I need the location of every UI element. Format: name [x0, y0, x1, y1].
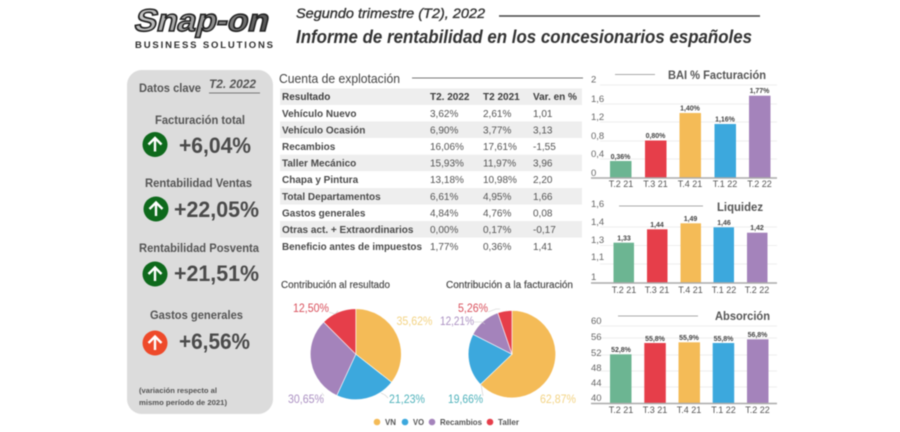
pie chart: contribución al resultado — [281, 279, 432, 406]
bar chart: BAI % facturación: T.2 22 — [747, 179, 772, 189]
kpi: rentabilidad posventa: +21,51% — [174, 261, 259, 286]
table: resultados: 4,84% — [430, 208, 458, 220]
table: resultados: 3,13 — [533, 126, 553, 136]
table: resultados: T2 2021 — [483, 92, 520, 103]
pie legend: Taller — [498, 417, 520, 427]
pie chart: contribución al resultado: 12,50% — [293, 303, 329, 315]
table: resultados: Var. en % — [533, 92, 577, 103]
bar chart: BAI % facturación: T.1 22 — [713, 179, 737, 189]
pie legend: VN — [385, 417, 396, 427]
bar chart: absorción: 40 — [591, 393, 602, 404]
bar chart: absorción: 55,8% — [714, 336, 734, 343]
pie chart: contribución al resultado: 21,23% — [389, 394, 425, 406]
bar chart: absorción: 55,8% — [645, 336, 666, 343]
table: resultados: 10,98% — [483, 175, 517, 186]
kpi: gastos generales: +6,56% — [179, 329, 250, 354]
bar chart: liquidez: T.3 21 — [645, 285, 669, 295]
bar chart: absorción: 55,9% — [679, 335, 700, 342]
bar chart: liquidez: Liquidez — [717, 200, 763, 214]
kpi: rentabilidad ventas — [144, 176, 259, 222]
table: resultados: Chapa y Pintura — [282, 175, 359, 186]
table: resultados: -0,17 — [533, 225, 556, 236]
pie chart: contribución al resultado: Contribución al resultado — [281, 279, 390, 291]
bar chart: liquidez: 1,33 — [617, 236, 631, 242]
bar chart: absorción: 56,8% — [748, 332, 768, 339]
table heading: cuenta de explotación: Cuenta de explotación — [279, 72, 400, 86]
table: resultados: 11,97% — [483, 158, 516, 170]
table: resultados: 6,90% — [430, 126, 458, 136]
pie chart: contribución a la facturación: Contribución a la facturación — [446, 279, 573, 291]
table: resultados — [280, 88, 582, 253]
bar chart: BAI % facturación: BAI % Facturación — [668, 68, 766, 82]
bar chart: BAI % facturación — [591, 68, 777, 189]
table: resultados: Vehículo Nuevo — [282, 109, 356, 120]
table: resultados: 1,66 — [533, 192, 553, 203]
table: resultados: T2. 2022 — [430, 92, 470, 103]
bar chart: liquidez: T.2 21 — [612, 285, 636, 295]
table: resultados: 4,95% — [483, 192, 511, 203]
pie chart: contribución a la facturación: 19,66% — [448, 394, 483, 406]
logo: Snap-on Business Solutions: BUSINESS SOLUTIONS — [135, 40, 273, 51]
table: resultados: Otras act. + Extraordinarios — [282, 225, 414, 236]
bar chart: absorción: T.2 22 — [745, 405, 770, 415]
bar chart: BAI % facturación: 1,40% — [680, 106, 701, 112]
bar chart: absorción: T.3 21 — [643, 405, 667, 415]
bar chart: BAI % facturación: 0 — [591, 168, 596, 179]
bar chart: absorción: 52,8% — [611, 347, 632, 354]
bar chart: liquidez: 1,42 — [750, 225, 764, 232]
kpi: facturación total: +6,04% — [179, 133, 251, 158]
bar chart: liquidez: T.1 22 — [712, 285, 736, 295]
bar chart: absorción: T.4 21 — [677, 405, 701, 415]
logo: Snap-on Business Solutions: Snap-on — [131, 4, 274, 38]
bar chart: liquidez: 1 — [591, 272, 596, 283]
bar chart: absorción — [591, 309, 777, 415]
bar chart: liquidez: 1,4 — [591, 217, 604, 228]
bar chart: BAI % facturación: T.4 21 — [678, 179, 702, 189]
bar chart: liquidez: 1,46 — [717, 220, 731, 227]
bar chart: BAI % facturación: 1,6 — [591, 94, 604, 105]
bar chart: liquidez: 1,1 — [591, 252, 604, 263]
bar chart: absorción: 52 — [591, 348, 602, 359]
bar chart: absorción: Absorción — [715, 309, 770, 323]
bar chart: BAI % facturación: 0,4 — [591, 149, 604, 160]
bar chart: BAI % facturación: 2 — [591, 74, 596, 86]
bar chart: absorción: T.1 22 — [711, 405, 736, 415]
table: resultados: 3,62% — [430, 109, 458, 120]
table: resultados: 2,20 — [533, 175, 553, 186]
bar chart: BAI % facturación: 0,8 — [591, 131, 604, 142]
table: resultados: 15,93% — [430, 158, 464, 170]
table: resultados: 6,61% — [430, 192, 458, 203]
table: resultados: 0,00% — [430, 225, 458, 236]
bar chart: liquidez: 1,44 — [650, 222, 664, 229]
bar chart: liquidez — [591, 199, 777, 295]
table: resultados: 1,77% — [430, 242, 458, 253]
bar chart: liquidez: 1,6 — [591, 199, 604, 210]
kpi: rentabilidad ventas: Rentabilidad Ventas — [145, 176, 252, 190]
bar chart: BAI % facturación: 1,77% — [750, 88, 770, 95]
bar chart: BAI % facturación: 0,36% — [611, 154, 631, 161]
pie chart: contribución a la facturación — [440, 279, 576, 406]
table: resultados: Recambios — [282, 142, 336, 153]
table: resultados: Vehículo Ocasión — [282, 126, 365, 136]
table: resultados: Taller Mecánico — [282, 158, 356, 170]
bar chart: liquidez: 1,49 — [684, 216, 697, 223]
footnote: mismo período de 2021) — [139, 398, 228, 407]
pie chart: contribución a la facturación: 12,21% — [440, 316, 474, 328]
kpi: rentabilidad ventas: +22,05% — [174, 197, 259, 222]
table: resultados: 4,76% — [483, 208, 511, 220]
bar chart: BAI % facturación: 1,16% — [715, 116, 736, 124]
table: resultados: 0,36% — [483, 242, 511, 253]
table: resultados: Total Departamentos — [282, 192, 381, 203]
pie chart: contribución a la facturación: 5,26% — [458, 303, 488, 315]
kpi: rentabilidad posventa — [139, 241, 259, 286]
pie legend: VO — [413, 417, 424, 427]
kpi: rentabilidad posventa: Rentabilidad Posventa — [139, 241, 259, 255]
kpi: facturación total: Facturación total — [155, 113, 245, 127]
table: resultados: 1,41 — [533, 242, 553, 253]
kpi: facturación total — [142, 113, 251, 158]
table: resultados: 2,61% — [483, 109, 511, 120]
bar chart: absorción: T.2 21 — [609, 405, 633, 415]
table: resultados: 3,77% — [483, 126, 511, 136]
panel heading: T2. 2022 — [209, 77, 256, 91]
pie chart: contribución al resultado: 30,65% — [288, 394, 324, 406]
bar chart: BAI % facturación: 1,2 — [591, 112, 604, 123]
pie legend: Recambios — [440, 417, 482, 427]
table: resultados: 0,08 — [533, 208, 553, 220]
footnote: (variación respecto al — [139, 386, 217, 395]
bar chart: absorción: 44 — [591, 378, 602, 389]
bar chart: liquidez: 1,3 — [591, 235, 604, 246]
bar chart: liquidez: T.2 22 — [745, 285, 769, 295]
kpi: gastos generales: Gastos generales — [150, 308, 243, 322]
table: resultados: 13,18% — [430, 175, 464, 186]
pie legend — [374, 417, 520, 427]
bar chart: absorción: 48 — [591, 363, 602, 374]
table: resultados: Resultado — [282, 92, 330, 103]
title: Informe de rentabilidad en los concesionarios españoles — [296, 27, 752, 47]
kpi: gastos generales — [142, 308, 250, 356]
bar chart: liquidez: T.4 21 — [678, 285, 703, 295]
panel: datos clave — [127, 70, 273, 414]
bar chart: BAI % facturación: 0,80% — [646, 133, 666, 140]
table: resultados: Gastos generales — [282, 208, 366, 220]
logo: Snap-on Business Solutions — [131, 4, 274, 51]
pie chart: contribución al resultado: 35,62% — [396, 316, 432, 328]
table: resultados: -1,55 — [533, 142, 556, 153]
bar chart: BAI % facturación: T.2 21 — [609, 179, 633, 189]
header: subtitle: Segundo trimestre (T2), 2022 — [296, 5, 485, 21]
bar chart: BAI % facturación: T.3 21 — [643, 179, 668, 189]
table: resultados: 16,06% — [430, 142, 464, 153]
table: resultados: 17,61% — [483, 142, 517, 153]
table: resultados: 1,01 — [533, 109, 553, 120]
footnote — [139, 386, 228, 407]
pie chart: contribución a la facturación: 62,87% — [540, 394, 576, 406]
panel heading: Datos clave — [139, 81, 201, 95]
table: resultados: Beneficio antes de impuestos — [282, 242, 422, 253]
table: resultados: 3,96 — [533, 158, 553, 170]
table: resultados: 0,17% — [483, 225, 511, 236]
bar chart: absorción: 60 — [591, 316, 602, 327]
panel heading — [139, 77, 260, 95]
bar chart: absorción: 56 — [591, 332, 602, 343]
